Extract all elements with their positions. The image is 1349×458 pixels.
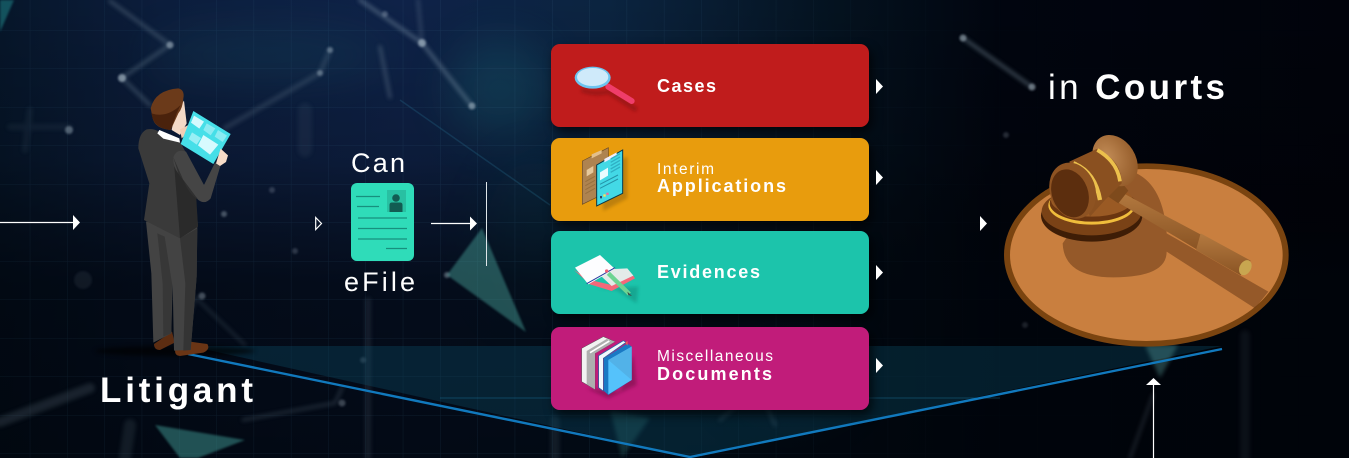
icon: open book and pencil bbox=[574, 255, 638, 303]
table shadows bbox=[1063, 173, 1268, 308]
gavel head bbox=[1083, 127, 1147, 195]
arrow: from courts bbox=[1146, 378, 1161, 458]
icon: stacked books bbox=[582, 337, 637, 398]
panel: miscellaneous documents: Miscellaneous bbox=[657, 348, 773, 365]
litigant label: Litigant bbox=[100, 371, 253, 410]
jacket bbox=[138, 129, 198, 238]
trousers bbox=[146, 222, 197, 351]
panel: interim applications bbox=[551, 138, 869, 221]
marker: outline triangle bbox=[316, 218, 322, 230]
tablet bbox=[181, 111, 231, 164]
panel: evidences bbox=[551, 231, 869, 314]
efile label: eFile bbox=[344, 267, 415, 297]
table bbox=[1004, 163, 1289, 347]
icon: efile document bbox=[351, 183, 414, 261]
divider bbox=[486, 182, 488, 266]
hand bbox=[216, 149, 228, 166]
shoes bbox=[154, 332, 175, 350]
arrow: into litigant bbox=[0, 215, 80, 230]
neck and face bbox=[172, 101, 187, 135]
panel: evidences: Evidences bbox=[657, 262, 760, 282]
panel: cases: Cases bbox=[657, 76, 716, 96]
collar bbox=[157, 130, 180, 143]
hair bbox=[151, 88, 184, 130]
icon: clipboards bbox=[582, 148, 627, 211]
gavel handle bbox=[1114, 191, 1202, 249]
panel: cases bbox=[551, 44, 869, 127]
markers: category arrowheads bbox=[876, 79, 987, 373]
floor line bbox=[188, 349, 1222, 457]
panel: miscellaneous documents: Documents bbox=[657, 364, 772, 384]
arrow: document to categories bbox=[431, 216, 477, 230]
sound block bbox=[1041, 190, 1142, 242]
in courts heading: in Courts bbox=[1048, 68, 1225, 107]
panel: interim applications: Applications bbox=[657, 176, 786, 196]
panel: interim applications: Interim bbox=[657, 161, 714, 178]
can label: Can bbox=[351, 148, 405, 178]
panel: miscellaneous documents bbox=[551, 327, 869, 410]
icon: gavel on round table bbox=[1004, 127, 1289, 347]
figure: litigant with tablet bbox=[138, 88, 231, 356]
icon: magnifying glass bbox=[575, 67, 637, 110]
